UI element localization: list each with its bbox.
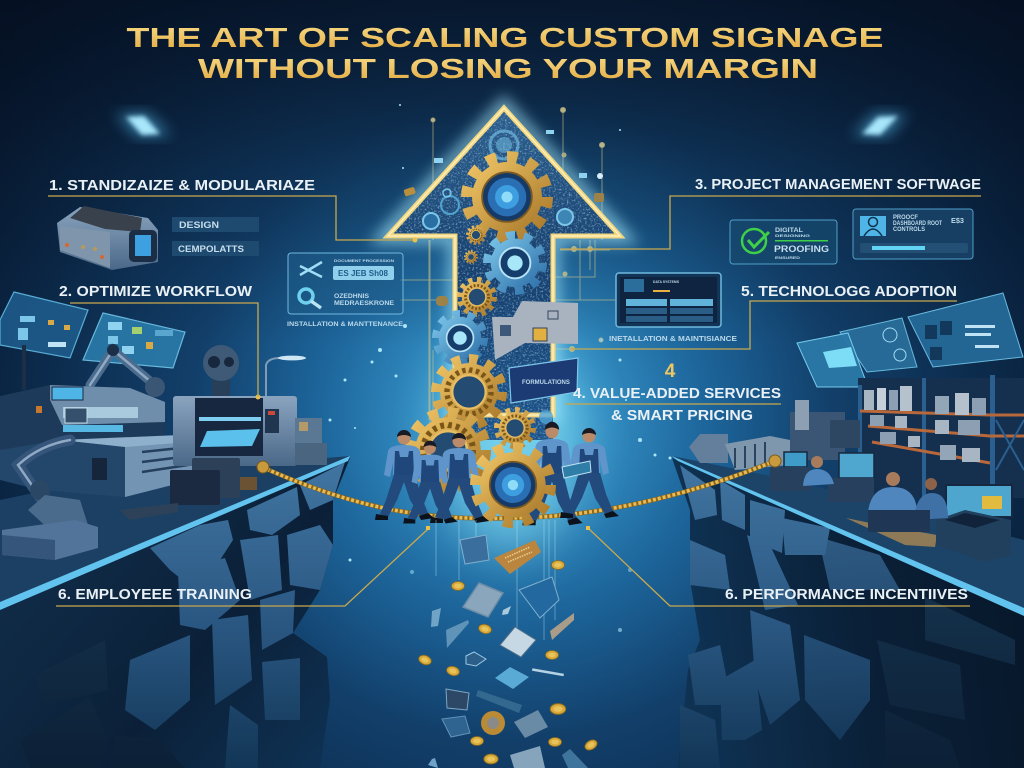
panel: project dashboard [853, 209, 973, 259]
sparkles [328, 104, 672, 632]
panel: tablet: DATA SYSTEMS [653, 279, 679, 284]
robot assistant [203, 345, 239, 398]
label 1: standardize and modularize: 1. STANDIZAIZE & MODULARIAZE [49, 178, 315, 194]
floating signage cards [492, 301, 578, 424]
label 4: value-added services and smart pricing: 4. VALUE-ADDED SERVICES [573, 386, 781, 402]
left equipment scene [0, 292, 327, 560]
left cliff [0, 456, 350, 768]
label 5: technology adoption [572, 284, 957, 349]
label 5: technology adoption: 5. TECHNOLOGG ADOPTION [741, 284, 957, 300]
panel: installation and maintenance left: MEDRAESKRONE [334, 301, 394, 307]
warehouse racks [858, 375, 1024, 505]
panel: digital proofing: DESIGNING [775, 233, 810, 238]
label 3: project management software: 3. PROJECT MANAGEMENT SOFTWAGE [695, 177, 981, 193]
right cliff [672, 456, 1024, 768]
seated workers [803, 456, 948, 532]
screen panels [797, 293, 1023, 387]
panel: digital proofing: PROOFING [774, 244, 829, 254]
label 1: standardize and modularize [48, 178, 418, 242]
tag: design [172, 217, 259, 232]
panel: digital proofing: ENSURED [775, 255, 800, 260]
title: WITHOUT LOSING YOUR MARGIN [198, 53, 818, 84]
title [126, 22, 884, 84]
panel: installation and maintenance left: DOCUMENT PROCESSION [334, 258, 394, 263]
label 6: performance incentives: 6. PERFORMANCE INCENTIIVES [725, 587, 968, 603]
wide-format printer [173, 394, 297, 466]
panel: installation and maintenance left [287, 253, 403, 328]
ceiling lights [115, 112, 908, 137]
gears inside arrow [411, 131, 573, 487]
stacked boxes [295, 418, 327, 465]
large machine [0, 385, 192, 497]
panel: project dashboard: CONTROLS [893, 227, 925, 233]
upper robot arm [90, 344, 165, 397]
tag: design: DESIGN [179, 220, 219, 230]
toolboxes [170, 458, 257, 505]
label 6: performance incentives [586, 526, 970, 606]
panel: digital proofing: DIGITAL [775, 228, 803, 234]
label 2: optimize workflow: 2. OPTIMIZE WORKFLOW [59, 284, 252, 300]
right warehouse scene [689, 293, 1024, 562]
workers team on rope [375, 422, 619, 525]
label 4: value-added services and smart pricing: 4 [665, 361, 676, 382]
tag: templates [172, 241, 259, 256]
label 4: value-added services and smart pricing [565, 361, 781, 424]
label 6: employee training [56, 526, 430, 606]
icon: modular machine [57, 206, 158, 270]
panel: tablet [616, 273, 721, 327]
falling pieces [417, 520, 599, 768]
panel: project dashboard: DASHBOARD ROOT [893, 221, 942, 227]
floating signage cards: FORMULATIONS [522, 380, 570, 386]
panel: installation and maintenance left: INSTALLATION & MANTTENANCE [287, 322, 403, 328]
panel: project dashboard: PROOCF [893, 215, 918, 221]
central upward arrow [384, 105, 624, 440]
label 4: value-added services and smart pricing: & SMART PRICING [611, 408, 753, 424]
screen: left dashboard [0, 292, 88, 358]
workstations [770, 452, 1012, 562]
label 6: employee training: 6. EMPLOYEEE TRAINING [58, 587, 252, 603]
lower robot arm [2, 440, 98, 560]
label 3: project management software [560, 177, 981, 249]
label 2: optimize workflow [59, 284, 258, 397]
tiny floating tokens [403, 130, 604, 306]
panel: installation and maintenance left: ES JEB Sh08 [338, 269, 389, 278]
panel: project dashboard: E$3 [951, 218, 964, 225]
title: THE ART OF SCALING CUSTOM SIGNAGE [126, 22, 884, 53]
tag: templates: CEMPOLATTS [178, 244, 244, 254]
screen: right dashboard [83, 313, 185, 368]
rope [257, 455, 781, 518]
panel: installation and maintenance left: OZEDHNIS [334, 294, 369, 300]
caption: installation and maintenance right: INETALLATION & MAINTISIANCE [609, 336, 737, 343]
circuit lines around arrow [400, 108, 616, 470]
tablet held by workers [562, 461, 591, 478]
panel: digital proofing [730, 220, 837, 264]
lamp [266, 356, 306, 398]
server and sign stacks [689, 400, 860, 470]
